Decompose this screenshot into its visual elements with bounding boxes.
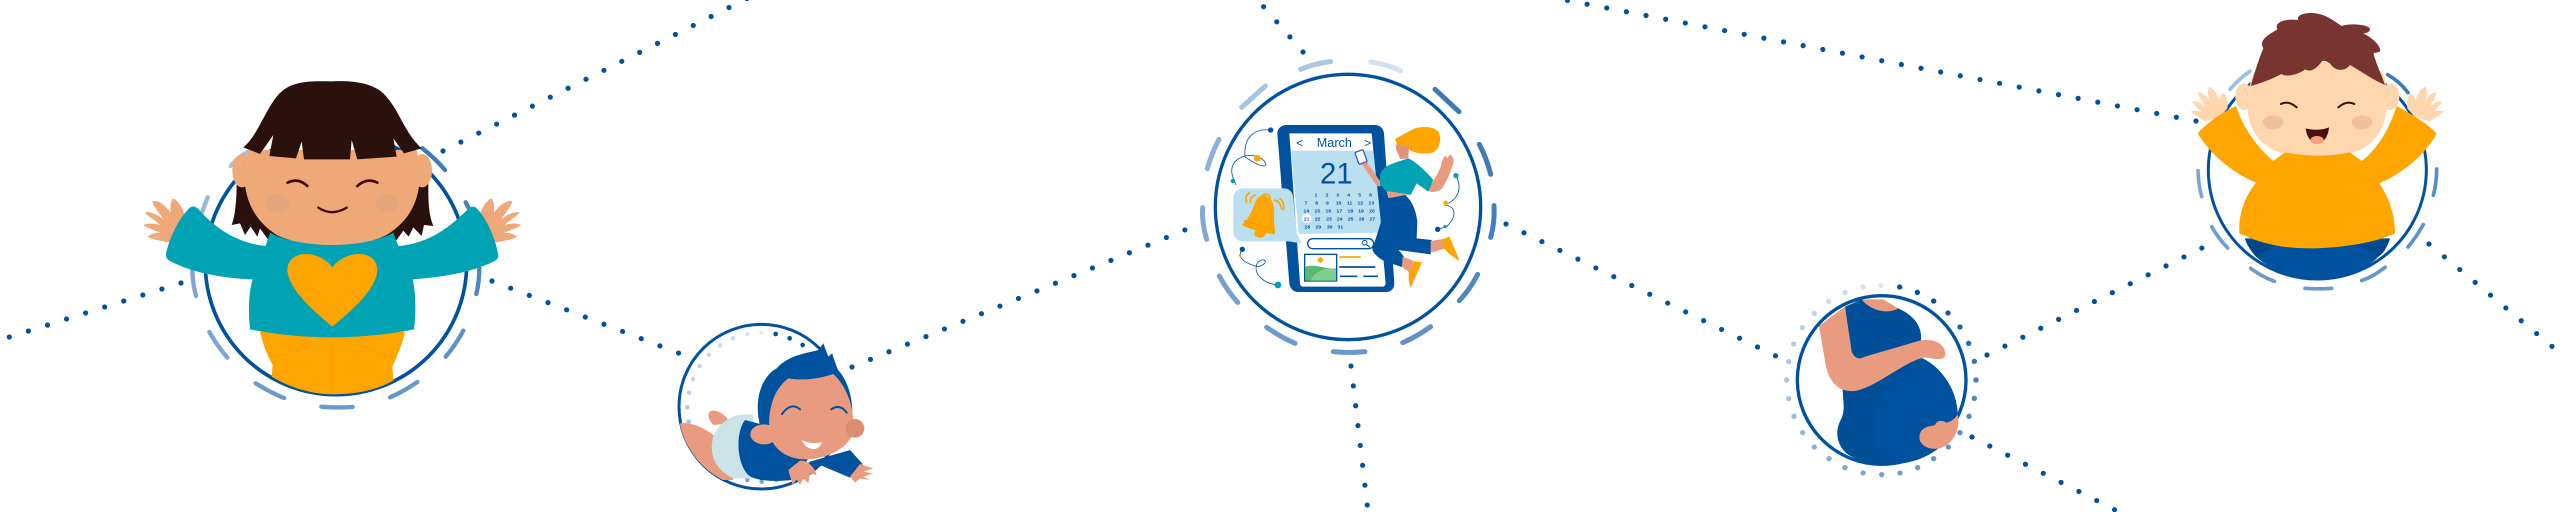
diaper (712, 414, 757, 478)
cheeks (265, 195, 290, 212)
calendar text: 9 (1326, 200, 1329, 206)
ears (232, 154, 252, 187)
stage: baby (677, 324, 873, 489)
heart (287, 254, 377, 327)
calendar text: 21 (1320, 157, 1353, 190)
back hair (758, 343, 852, 427)
calendar text: 10 (1336, 200, 1342, 206)
calendar text: 6 (1369, 192, 1372, 198)
legs (677, 423, 733, 480)
stage: boy (2191, 13, 2444, 289)
calendar text: 11 (1347, 200, 1353, 206)
calendar text: 31 (1338, 224, 1343, 230)
dashed ring (1202, 62, 1494, 352)
stage: pregnant figure (1784, 283, 1979, 477)
trousers (2245, 238, 2390, 279)
dotted ring (685, 330, 805, 484)
calendar text: 16 (1326, 208, 1331, 214)
calendar text: 20 (1369, 208, 1375, 214)
thumbnail and lines (1305, 254, 1337, 281)
calendar text: 29 (1316, 224, 1321, 230)
ring (679, 324, 844, 489)
ring (1797, 296, 1966, 464)
cheeks (2263, 115, 2283, 129)
calendar text: 1 (1315, 192, 1318, 198)
stage: girl (143, 81, 521, 407)
calendar text (1296, 136, 1375, 230)
eyes and smile (782, 406, 847, 414)
circle ring (205, 133, 467, 395)
calendar text: 22 (1315, 216, 1321, 222)
dotted ring (1784, 283, 1979, 477)
calendar text: 12 (1358, 200, 1363, 206)
front hair (243, 81, 422, 159)
calendar text: 8 (1315, 200, 1318, 206)
decorative threads (1232, 130, 1459, 285)
calendar text: 21 (1304, 216, 1310, 222)
calendar text: < (1296, 136, 1303, 150)
face (2247, 61, 2387, 157)
calendar text: 26 (1359, 216, 1365, 222)
hands (2191, 87, 2444, 122)
phone (1277, 125, 1394, 292)
calendar text: 14 (1304, 208, 1309, 214)
calendar text: 27 (1370, 216, 1375, 222)
calendar text: > (1364, 136, 1371, 150)
calendar text: 13 (1369, 200, 1374, 206)
face (245, 150, 420, 245)
calendar text: 17 (1337, 208, 1342, 214)
sweater (2198, 106, 2437, 248)
phone in hand (1355, 150, 1367, 164)
body (738, 420, 863, 481)
back hair (232, 183, 433, 240)
face (769, 374, 854, 459)
lower hand (1919, 414, 1958, 449)
mouth (2306, 127, 2329, 143)
calendar text: 7 (1305, 200, 1308, 206)
neck (1862, 299, 1898, 311)
dashed ring (2198, 71, 2437, 289)
calendar text: 15 (1315, 208, 1320, 214)
arm (1819, 307, 1945, 391)
hands (788, 461, 817, 485)
search bar (1308, 239, 1374, 249)
calendar text: 24 (1337, 216, 1343, 222)
eyes and mouth (288, 181, 377, 212)
calendar text: 2 (1326, 192, 1329, 198)
bell bubble (1233, 188, 1302, 243)
bell (1242, 196, 1275, 234)
right arm (1427, 154, 1454, 192)
calendar text: 28 (1305, 224, 1310, 230)
stage: calendar (1202, 62, 1494, 352)
pants (260, 332, 405, 394)
legs and shoes (1431, 239, 1446, 253)
ears (2235, 83, 2253, 110)
head and neck (1396, 144, 1409, 159)
eyes (2281, 103, 2354, 107)
body (1837, 299, 1958, 465)
calendar text: March (1317, 136, 1352, 150)
ring (1215, 74, 1481, 340)
sweater (166, 206, 498, 337)
left arm (1357, 154, 1382, 187)
calendar text: 30 (1327, 224, 1333, 230)
calendar text: 3 (1336, 192, 1339, 198)
calendar text: 5 (1358, 192, 1361, 198)
shirt (1380, 158, 1433, 195)
calendar text: 23 (1326, 216, 1332, 222)
calendar text: 4 (1347, 192, 1350, 198)
dashed ring (192, 148, 479, 407)
trousers (1372, 195, 1432, 267)
hair (1395, 127, 1440, 154)
midriff (1387, 191, 1409, 198)
ring (2208, 61, 2426, 279)
calendar text: 25 (1348, 216, 1354, 222)
calendar text: 18 (1348, 208, 1353, 214)
hair (2251, 13, 2385, 86)
woman (1355, 127, 1459, 287)
hands (143, 198, 521, 243)
calendar text: 19 (1358, 208, 1364, 214)
belly (1875, 357, 1958, 465)
